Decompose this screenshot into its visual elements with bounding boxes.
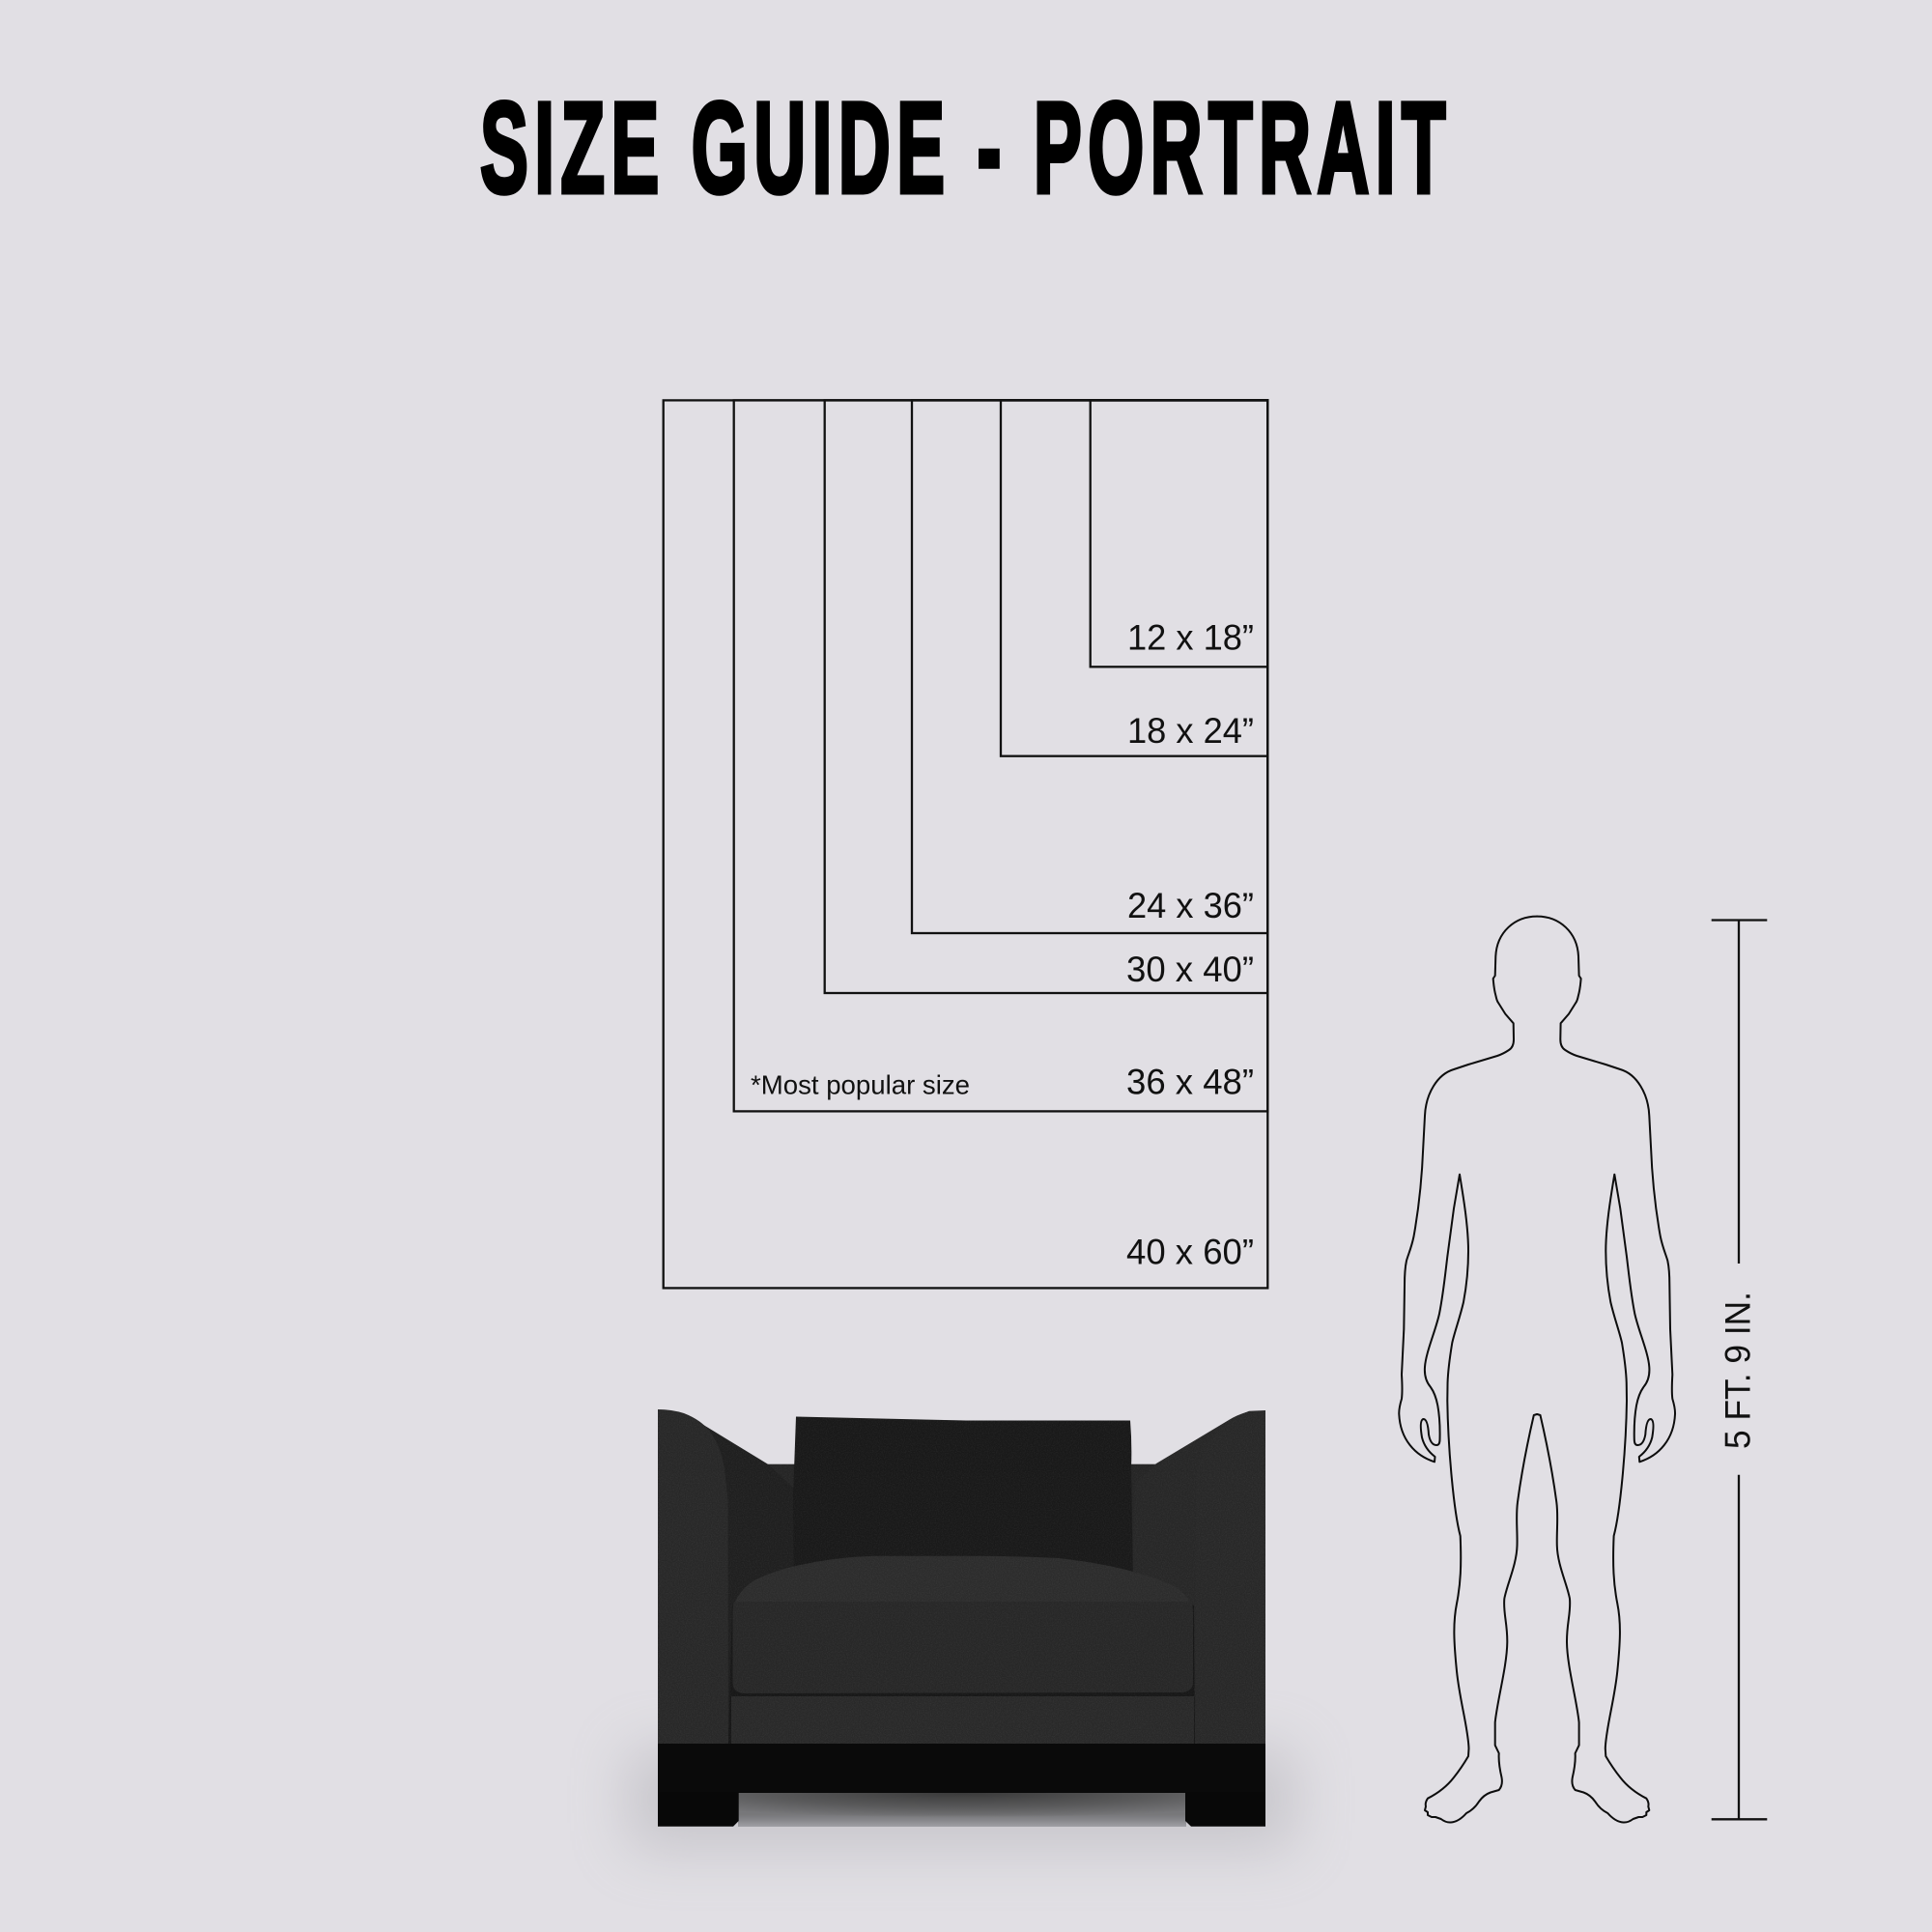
- note: most popular size: *Most popular size: [751, 1070, 970, 1100]
- frame: 12 x 18: [1091, 400, 1267, 667]
- chair: lower seat rail: [731, 1696, 1194, 1744]
- frame: 30 x 40: [825, 400, 1267, 993]
- label: 40 x 60: 40 x 60”: [1126, 1232, 1254, 1271]
- size labels: [1126, 618, 1254, 1271]
- chair: left arm front: [658, 1409, 728, 1744]
- marker: lower line: [1738, 1475, 1740, 1819]
- label: 18 x 24: 18 x 24”: [1127, 711, 1254, 751]
- height dimension marker: [1712, 920, 1767, 1819]
- chair: under-frame shadow: [738, 1792, 1186, 1827]
- marker: upper line: [1738, 920, 1740, 1264]
- armchair: [658, 1409, 1265, 1827]
- title: SIZE GUIDE - PORTRAIT: [480, 75, 1452, 219]
- label: 24 x 36: 24 x 36”: [1127, 886, 1254, 925]
- label: 30 x 40: 30 x 40”: [1126, 950, 1254, 989]
- chair: left inner arm: [676, 1412, 796, 1744]
- chair: backrest behind cushion: [768, 1464, 1158, 1571]
- frame: 18 x 24: [1001, 400, 1267, 756]
- chair: right arm front: [1195, 1410, 1265, 1744]
- body: left half: [1399, 917, 1537, 1823]
- frame: 36 x 48: [734, 400, 1267, 1111]
- height label: 5 FT. 9 IN.: [1718, 1292, 1758, 1449]
- label: 36 x 48: 36 x 48”: [1126, 1063, 1254, 1102]
- label: 12 x 18: 12 x 18”: [1127, 618, 1254, 658]
- chair: seat cushion front: [732, 1602, 1193, 1693]
- human silhouette: [1399, 917, 1675, 1823]
- chair: dark backing between parts: [724, 1584, 1198, 1745]
- chair: left leg: [658, 1792, 739, 1827]
- frame: 24 x 36: [912, 400, 1267, 933]
- chair: back cushion: [793, 1416, 1133, 1584]
- chair: right leg: [1185, 1792, 1265, 1827]
- marker: top cap: [1712, 919, 1767, 922]
- frame: 40 x 60: [664, 400, 1267, 1288]
- marker: bottom cap: [1712, 1818, 1767, 1820]
- chair: under-frame floor fade: [738, 1792, 1186, 1827]
- chair: seat cushion top: [734, 1556, 1191, 1604]
- floor shadow: [628, 1748, 1294, 1850]
- body: right half: [1537, 917, 1675, 1823]
- chair: base: [658, 1744, 1265, 1793]
- size frames chart: [664, 400, 1267, 1288]
- chair: right inner arm: [1132, 1412, 1246, 1744]
